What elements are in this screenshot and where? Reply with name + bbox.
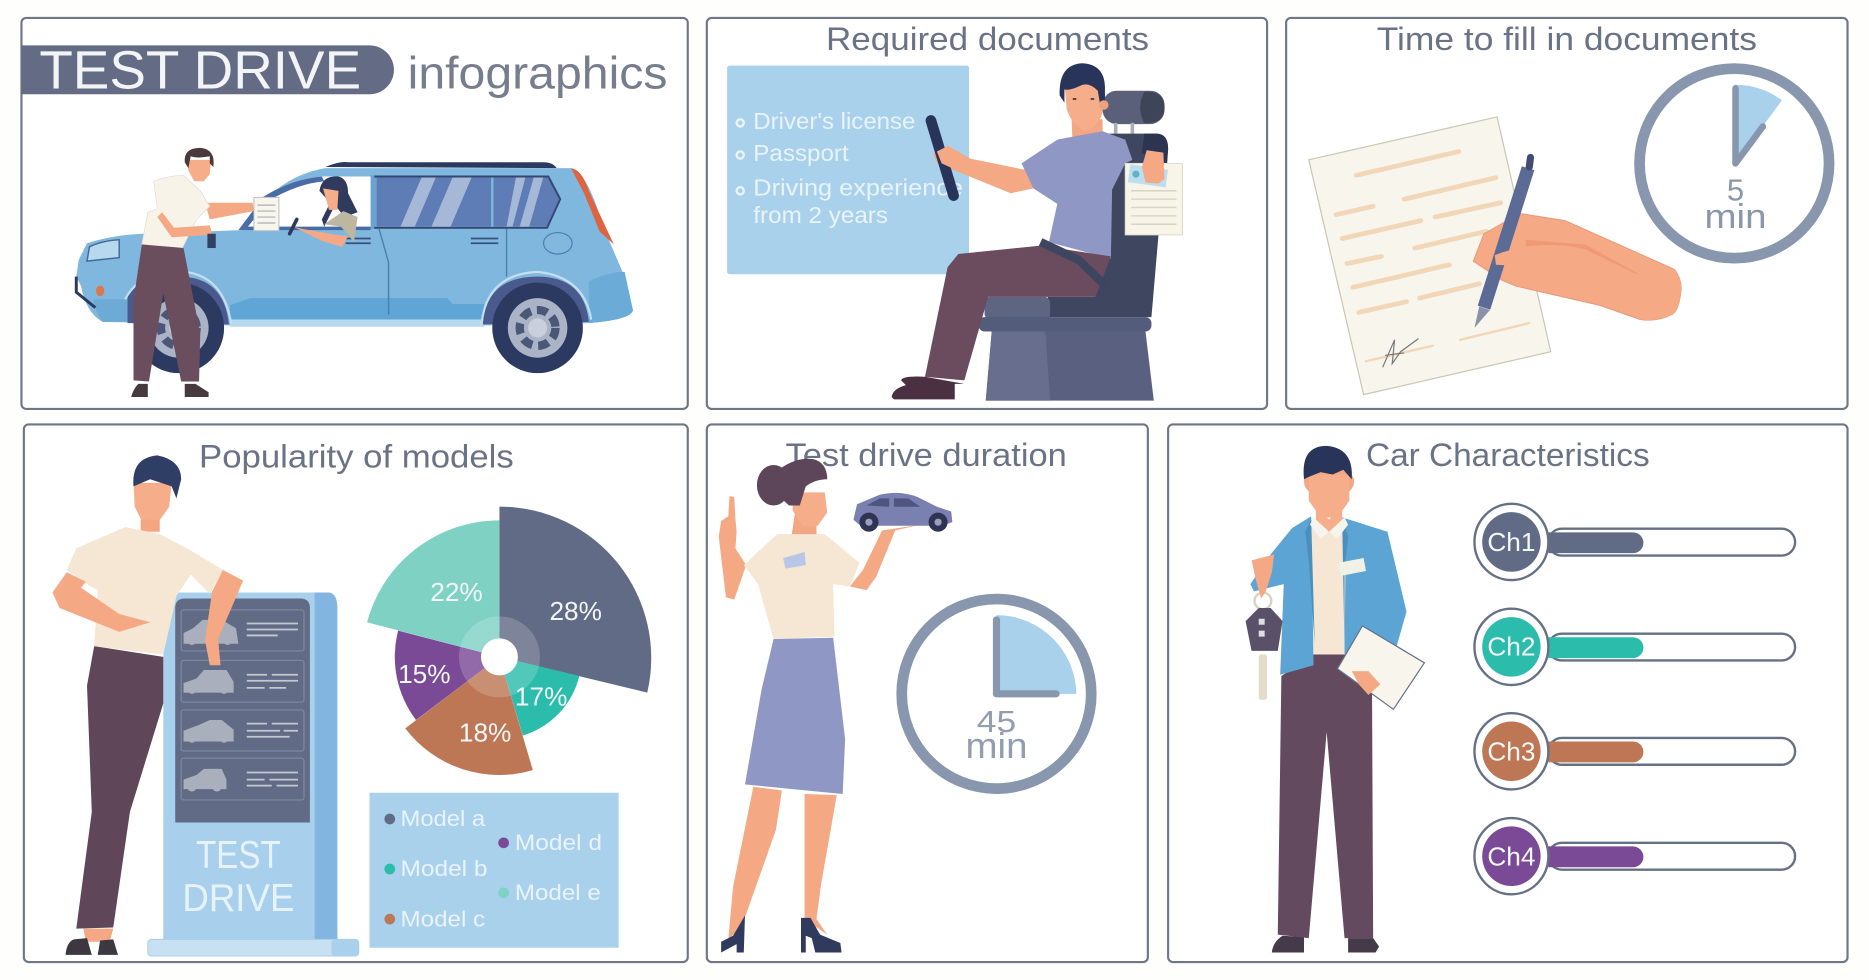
- legend: Model b: [401, 856, 488, 881]
- pie chart: 17%: [515, 682, 567, 712]
- panel: required documents: [707, 18, 1267, 409]
- figure: salesman with document: [131, 148, 279, 397]
- clock: 45 min: [902, 599, 1091, 789]
- meter: Ch1: Ch1: [1487, 527, 1535, 557]
- meter: Ch1: [1474, 504, 1795, 580]
- figure: man with car key and clipboard: [1246, 446, 1424, 952]
- illustration: paper form: [1309, 117, 1551, 395]
- meter: Ch2: Ch2: [1487, 632, 1535, 662]
- legend: Model e: [515, 880, 601, 905]
- pie chart: 28%: [549, 596, 602, 626]
- clock: 5 min: min: [1705, 198, 1766, 236]
- panel: car characteristics: [1168, 424, 1848, 962]
- heading: Popularity of models: [199, 438, 514, 474]
- clock: 5 min: [1640, 69, 1829, 258]
- clock: 45 min: min: [965, 726, 1027, 766]
- panel: popularity of models: [24, 424, 688, 962]
- document checklist: from 2 years: [753, 202, 888, 228]
- figure: man leaning on kiosk: [52, 455, 243, 955]
- clock: 45 min: 45: [977, 704, 1016, 739]
- panel: time to fill in documents: [1286, 18, 1848, 409]
- title banner: TEST DRIVE: [39, 40, 361, 100]
- document checklist: [727, 66, 969, 274]
- panel: test drive header with car: [21, 18, 688, 409]
- figure: saleswoman holding model car: [719, 459, 952, 952]
- icon: car key: [1246, 593, 1283, 700]
- document checklist: Driving experience: [753, 175, 963, 201]
- heading: Car Characteristics: [1366, 437, 1650, 473]
- meter: Ch2: [1474, 609, 1795, 685]
- document with ID card: [1125, 163, 1182, 235]
- seat: [979, 91, 1168, 401]
- meter: Ch4: Ch4: [1487, 841, 1535, 871]
- test drive kiosk: [148, 593, 359, 956]
- test drive kiosk: TEST: [196, 833, 281, 877]
- panel: test drive duration: [707, 424, 1148, 962]
- clock: 5 min: 5: [1727, 172, 1744, 207]
- pie chart: 18%: [459, 718, 511, 748]
- heading: Time to fill in documents: [1377, 21, 1757, 57]
- pie chart: 15%: [398, 659, 451, 689]
- figure: woman in car: [290, 176, 358, 247]
- heading: Test drive duration: [786, 437, 1067, 473]
- test drive kiosk: DRIVE: [182, 876, 294, 920]
- icon: model car: [853, 493, 952, 532]
- subtitle: infographics: [408, 47, 668, 98]
- legend: Model a: [401, 806, 486, 831]
- meter: Ch3: Ch3: [1487, 737, 1535, 767]
- icon: wheels: [134, 283, 583, 373]
- illustration: hand with pen: [1473, 157, 1681, 328]
- illustration: blue car: [76, 162, 633, 327]
- document checklist: Driver's license: [753, 108, 915, 134]
- heading: Required documents: [826, 21, 1149, 57]
- legend: [370, 793, 619, 948]
- front window with gap: [238, 177, 371, 230]
- meter: Ch3: [1474, 713, 1795, 789]
- legend: Model c: [401, 906, 485, 931]
- pie chart: 22%: [430, 577, 483, 607]
- pie chart: [367, 507, 651, 775]
- meter: Ch4: [1474, 818, 1795, 894]
- legend: Model d: [515, 830, 602, 855]
- icon: clipboard: [1337, 626, 1424, 709]
- document checklist: Passport: [753, 140, 849, 166]
- figure: seated driver in car seat: [892, 63, 1182, 401]
